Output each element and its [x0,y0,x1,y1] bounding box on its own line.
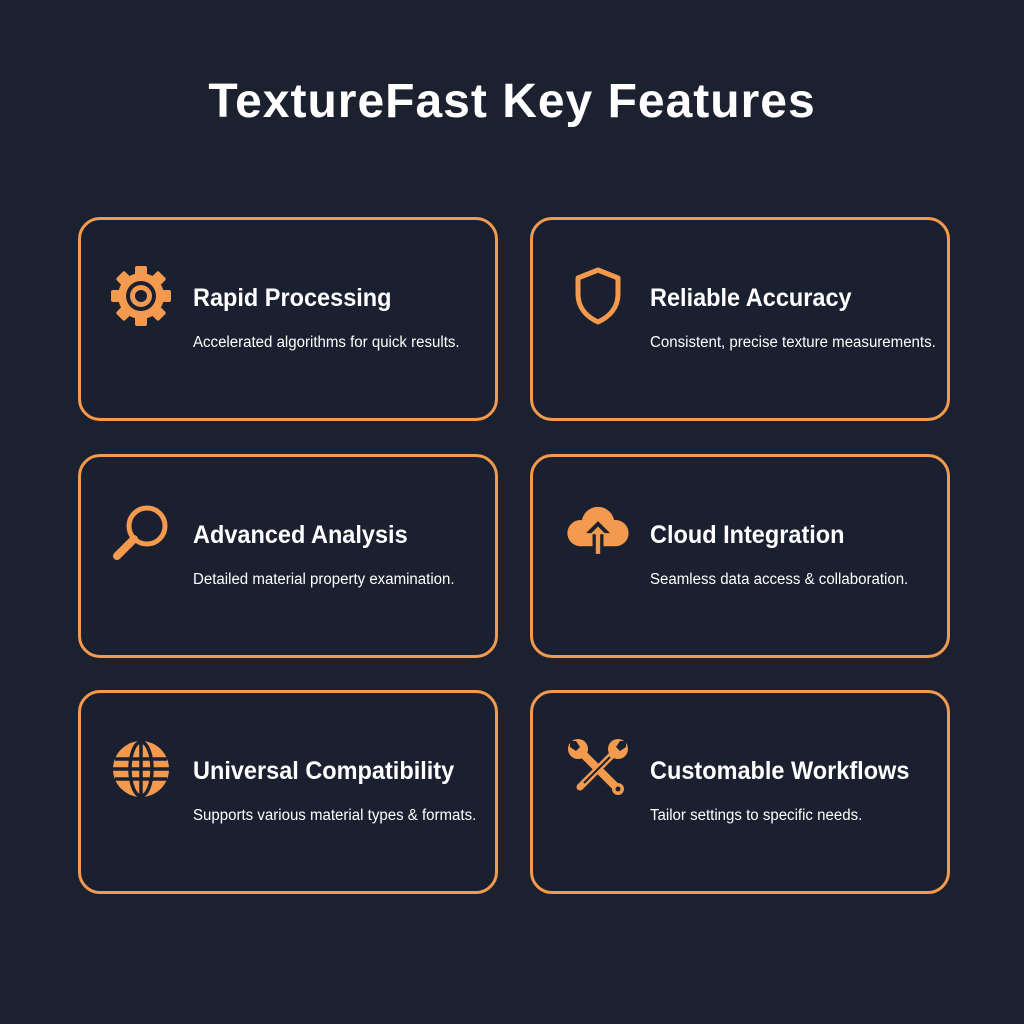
icon: gear [111,266,171,326]
icon: tools [568,739,628,795]
heading: Cloud Integration [650,521,845,549]
panel: reliable accuracy [530,217,950,421]
icon: globe [113,741,169,797]
panel: customable workflows [530,690,950,894]
heading: Rapid Processing [193,284,392,312]
panel: rapid processing [78,217,498,421]
icon: shield [576,268,620,324]
title: TextureFast Key Features [208,75,816,128]
description: Detailed material property examination. [193,571,455,588]
heading: Universal Compatibility [193,757,454,785]
icon: magnifier [113,506,168,560]
heading: Customable Workflows [650,757,909,785]
heading: Reliable Accuracy [650,284,852,312]
description: Accelerated algorithms for quick results. [193,334,460,351]
panel: universal compatibility [78,690,498,894]
description: Consistent, precise texture measurements. [650,334,936,351]
icon: cloud upload [567,506,629,554]
description: Seamless data access & collaboration. [650,571,908,588]
panel: advanced analysis [78,454,498,658]
description: Tailor settings to specific needs. [650,807,862,824]
panel: cloud integration [530,454,950,658]
heading: Advanced Analysis [193,521,408,549]
description: Supports various material types & formats. [193,807,476,824]
